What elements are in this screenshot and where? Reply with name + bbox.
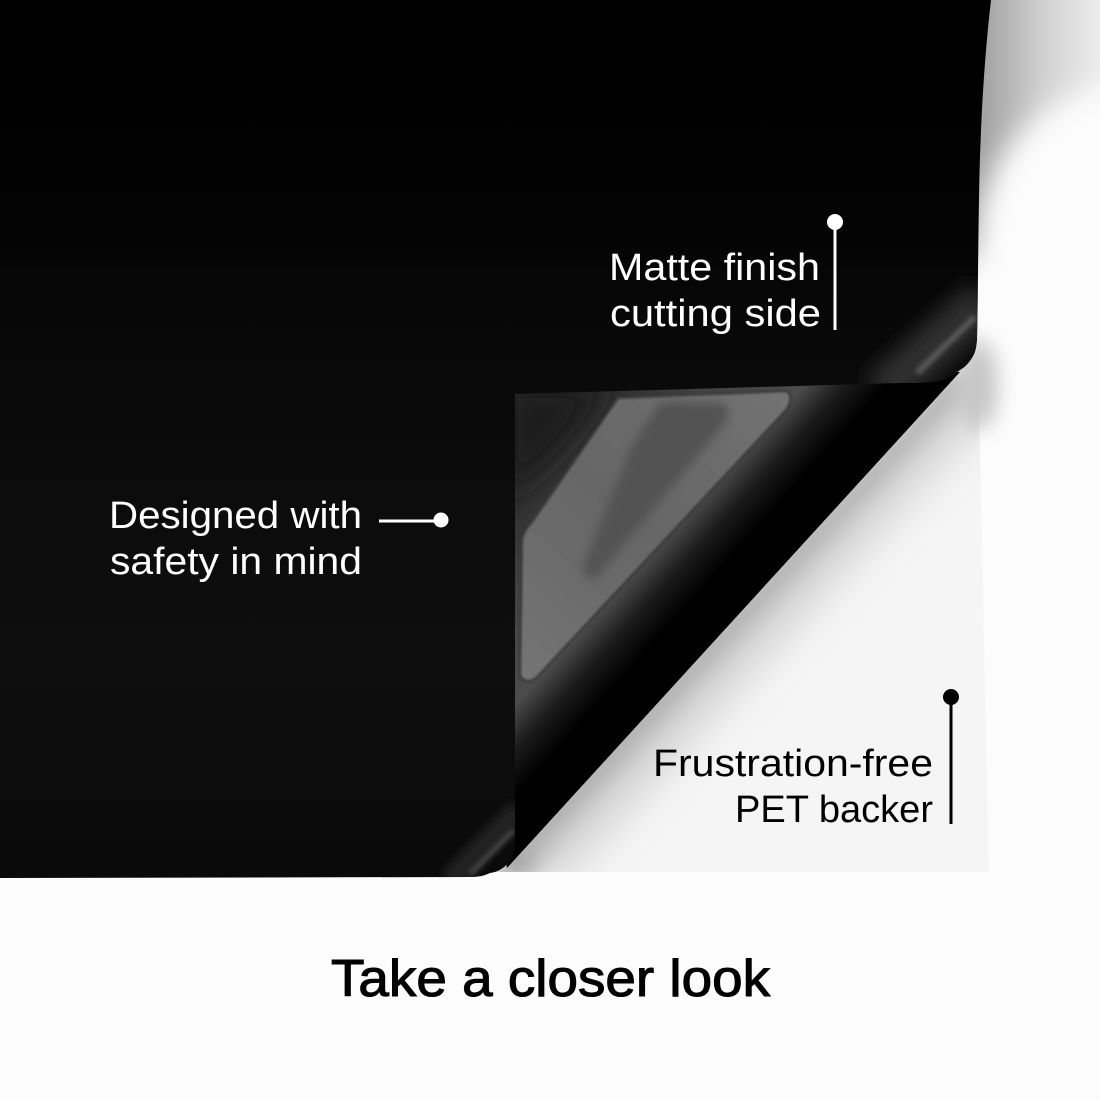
highlight: lower curl (470, 830, 514, 874)
callout: safety: safety in mind (110, 541, 362, 583)
top-right curl shadow (978, 0, 1100, 273)
soft glow: lower curl (450, 810, 520, 882)
highlight: upper curl (917, 317, 975, 373)
glare lobe inner (583, 402, 728, 579)
callout: safety (109, 495, 448, 583)
callout: PET backer: Frustration-free (653, 743, 933, 785)
callout: matte finish: cutting side (610, 293, 821, 335)
callout: PET backer: PET backer (735, 789, 933, 831)
folded glossy corner (500, 372, 960, 868)
dark upper-left corner (515, 392, 610, 496)
callout: matte finish: Matte finish (609, 247, 820, 289)
callout: safety: Designed with (109, 495, 362, 537)
white PET backer (490, 360, 1005, 880)
soft glow: upper curl (880, 300, 985, 395)
black sheet, matte cutting side (0, 0, 991, 882)
title: Take a closer look (331, 950, 771, 1008)
shadow beneath curl corner (958, 339, 998, 431)
glare lobe outer (520, 391, 790, 681)
callout: matte finish (609, 214, 843, 335)
callout: PET backer (653, 689, 959, 831)
